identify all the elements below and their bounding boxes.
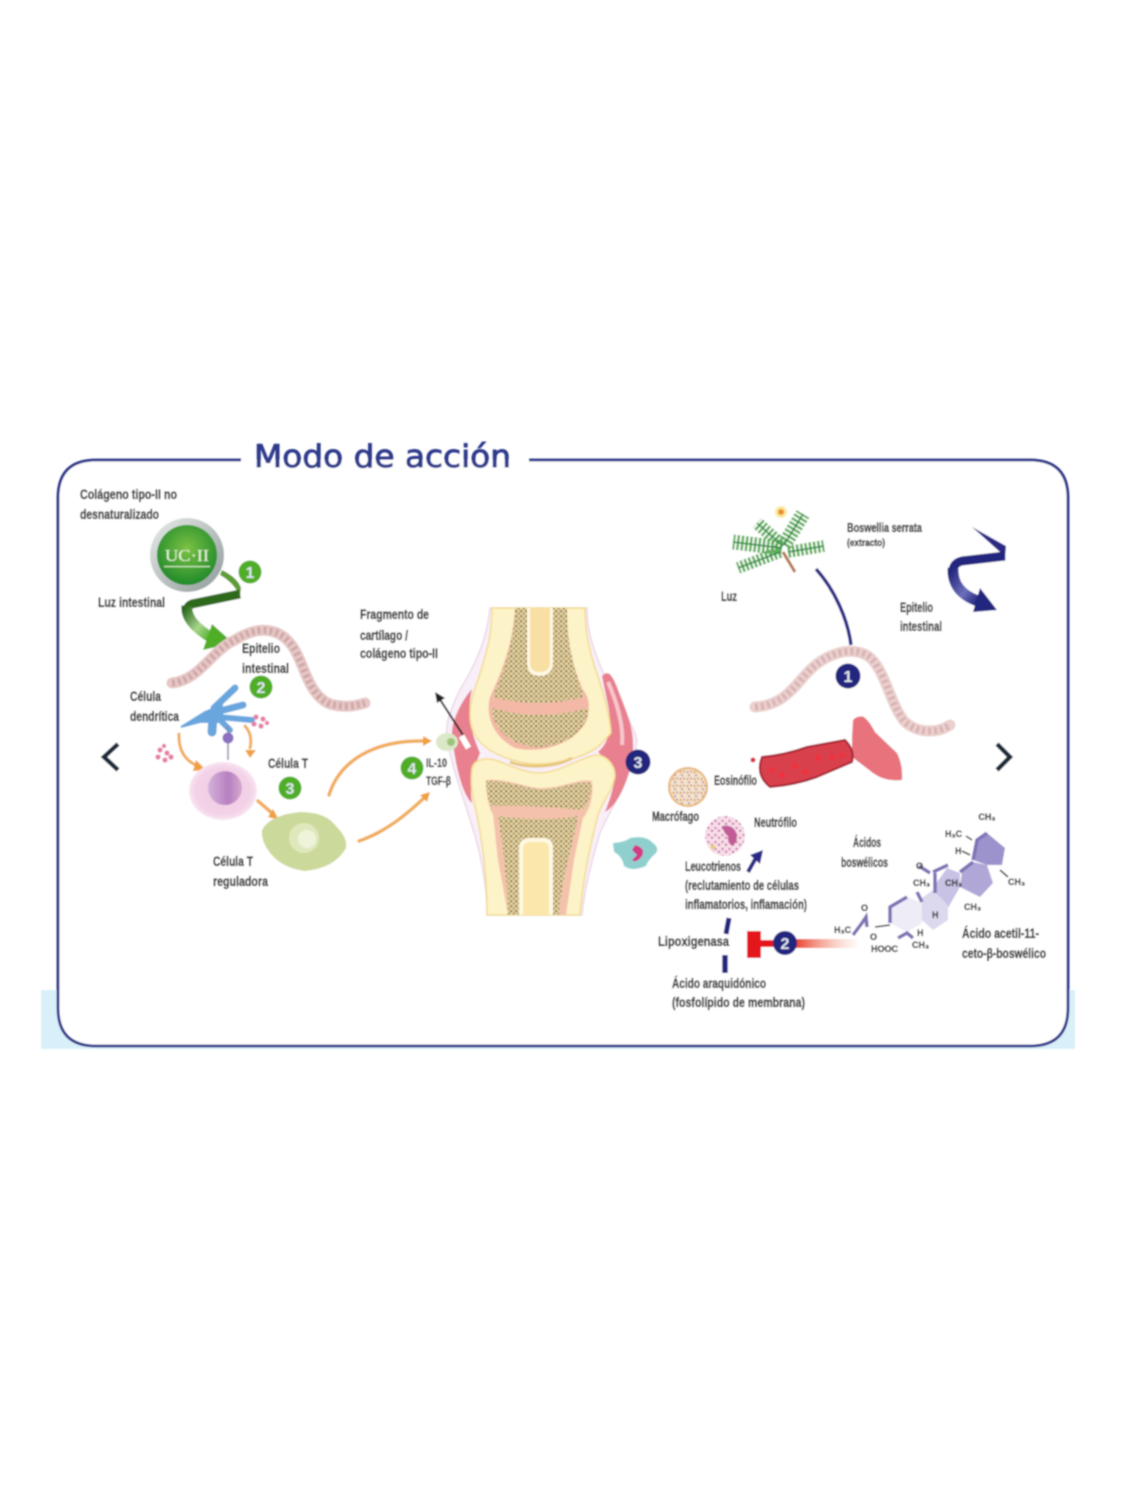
- molecule: AKBA: HOOC: [871, 944, 899, 954]
- molecule: AKBA: CH₃: [913, 878, 930, 888]
- molecule: AKBA: CH₃: [945, 878, 962, 888]
- intestinal epithelium: [172, 630, 365, 706]
- label: Boswellia serrata: (extracto): [847, 538, 885, 549]
- molecule: AKBA: O: [870, 932, 877, 942]
- synovium left: [452, 689, 480, 803]
- step 1 navy: 1: [844, 669, 853, 686]
- title: Modo de acción: [254, 439, 511, 475]
- label: boswellic acids: [841, 834, 888, 870]
- label: epithelium: Epitelio: [242, 640, 280, 656]
- arrow: fragment release: [435, 692, 471, 750]
- label: neutrophil: Neutrófilo: [754, 814, 797, 830]
- icon: UC-II badge: UC·II: [165, 546, 209, 565]
- arrow: next: [997, 744, 1010, 770]
- label: dendritic cell: [130, 688, 179, 724]
- lower spongy bone: [486, 781, 591, 810]
- label: cartilage fragment: colágeno tipo-II: [360, 645, 438, 661]
- label: collagen: desnaturalizado: [80, 506, 159, 522]
- icon: eosinophil: [668, 767, 708, 807]
- label: lipoxygenase: Lipoxigenasa: [658, 933, 729, 949]
- label: leukotrienes: Leucotrienos: [685, 858, 741, 874]
- molecule: AKBA: H: [955, 846, 962, 856]
- upper marrow ring: [489, 608, 589, 750]
- shaft spongy bone: [498, 816, 578, 915]
- label: dendritic cell: dendrítica: [130, 708, 179, 724]
- label: cartilage fragment: Fragmento de: [360, 606, 429, 622]
- step 4 green: [400, 756, 424, 780]
- orange arrowheads: [193, 736, 432, 820]
- label: T cell: Célula T: [268, 755, 308, 771]
- label: arachidonic acid: (fosfolípido de membrana): [672, 994, 805, 1010]
- molecule: AKBA: H: [917, 928, 924, 938]
- label: epithelium: [242, 640, 289, 676]
- arrow: leukotriene up: [748, 850, 763, 872]
- upper spongy bone: [493, 608, 584, 703]
- icon: regulatory T cell: [262, 812, 346, 871]
- label: intestinal lumen: Luz intestinal: [98, 594, 165, 610]
- lower medullary canal: [519, 838, 553, 915]
- step 1 green: [238, 560, 262, 584]
- icon: neutrophil: [705, 816, 745, 856]
- panel: Boswellia pathway: [652, 506, 1046, 1010]
- molecule: AKBA: CH₃: [978, 812, 996, 822]
- molecule: AKBA: CH₃: [1008, 877, 1025, 887]
- label: leukotrienes: inflamatorios, inflamación): [685, 896, 807, 912]
- intestinal epithelium right: [755, 651, 950, 731]
- label: regulatory T cell: reguladora: [213, 873, 268, 889]
- icon: macrophage cell: [613, 837, 657, 869]
- molecule: AKBA: [834, 812, 1025, 954]
- label: macrophage: Macrófago: [652, 808, 699, 824]
- canal inner lower: [523, 842, 549, 915]
- icon: UC-II badge: [150, 518, 224, 592]
- label: cartilage fragment: [360, 606, 438, 661]
- label: Boswellia serrata: Boswellia serrata: [847, 520, 923, 535]
- antigen presentation: [222, 726, 234, 760]
- icon: T cell: [189, 762, 257, 820]
- icon: blood vessel: [750, 716, 902, 787]
- label: epithelium: intestinal: [242, 660, 289, 676]
- molecule: AKBA: H₃C: [945, 829, 963, 839]
- label: collagen: [80, 486, 177, 522]
- step 2 navy: 2: [781, 936, 790, 953]
- label: epithelium right: Epitelio: [900, 599, 933, 615]
- pink molecules right: [251, 714, 269, 729]
- icon: Boswellia plant: [733, 506, 824, 572]
- label: Boswellia serrata: [847, 520, 923, 549]
- label: cytokines: IL-10: [426, 756, 447, 770]
- step 1 navy: [836, 664, 860, 688]
- orange arrows: [179, 726, 425, 841]
- label: epithelium right: [900, 599, 942, 634]
- lower bone: [471, 755, 615, 915]
- label: arachidonic acid: [672, 975, 805, 1010]
- label: collagen: Colágeno tipo-II no: [80, 486, 177, 502]
- label: AKBA name: [962, 925, 1046, 961]
- illustration: knee joint: [447, 608, 637, 915]
- icon: small fragment cell: [436, 733, 458, 751]
- arrow: green ribbon: [187, 570, 241, 650]
- panel: rounded frame: [58, 460, 1068, 1046]
- pink molecules left: [155, 744, 174, 763]
- joint cartilage highlight: [510, 758, 572, 766]
- molecule: AKBA: CH₃: [964, 902, 981, 912]
- label: regulatory T cell: [213, 853, 268, 889]
- label: arachidonic acid: Ácido araquidónico: [672, 975, 766, 991]
- step 1 green: 1: [246, 565, 255, 582]
- label: cytokines: TGF-β: [426, 774, 451, 788]
- label: AKBA name: ceto-β-boswélico: [962, 945, 1046, 961]
- arrow: navy line: [816, 569, 851, 645]
- upper medullary canal: [527, 608, 553, 676]
- label: leukotrienes: [685, 858, 807, 912]
- step 3 green: [278, 776, 302, 800]
- label: cartilage fragment: cartílago /: [360, 627, 408, 643]
- step 3 navy: [626, 750, 650, 774]
- step 4 green: 4: [408, 761, 417, 778]
- label: eosinophil: Eosinófilo: [714, 772, 757, 788]
- synovium highlight: [608, 682, 622, 745]
- label: AKBA name: Ácido acetil-11-: [962, 925, 1039, 941]
- molecule: AKBA: CH₃: [912, 940, 929, 950]
- label: regulatory T cell: Célula T: [213, 853, 253, 869]
- step 3 green: 3: [286, 781, 295, 798]
- label: boswellic acids: boswélicos: [841, 854, 888, 870]
- label: cytokines: [426, 756, 451, 788]
- step 2 green: 2: [257, 680, 266, 697]
- label: dendritic cell: Célula: [130, 688, 161, 704]
- molecule: AKBA: O: [916, 861, 923, 871]
- lower marrow ring: [486, 780, 593, 915]
- molecule: AKBA: H₃C: [834, 925, 852, 935]
- label: leukotrienes: (reclutamiento de células: [685, 877, 799, 893]
- label: epithelium right: intestinal: [900, 618, 942, 634]
- arrow: navy ribbon: [953, 527, 1006, 612]
- step 2 green: [250, 676, 272, 698]
- arrow: previous: [104, 744, 118, 770]
- label: lumen: Luz: [721, 588, 737, 604]
- dashed pathway: [725, 918, 729, 973]
- icon: dendritic cell: [181, 688, 252, 732]
- molecule: AKBA: H: [932, 910, 938, 920]
- step 2 navy: [773, 931, 797, 955]
- label: boswellic acids: Ácidos: [853, 834, 881, 850]
- synovium right: [598, 673, 633, 812]
- upper bone: [470, 608, 611, 764]
- panel: UC-II pathway: [80, 486, 438, 889]
- canal inner: [530, 608, 550, 672]
- upper spongy bone lower: [492, 708, 588, 747]
- inhibition bar: [747, 931, 857, 958]
- light blue background strip: [41, 990, 1075, 1049]
- molecule: AKBA: O: [861, 903, 868, 913]
- soft tissue envelope: [447, 608, 637, 915]
- step 3 navy: 3: [634, 755, 643, 772]
